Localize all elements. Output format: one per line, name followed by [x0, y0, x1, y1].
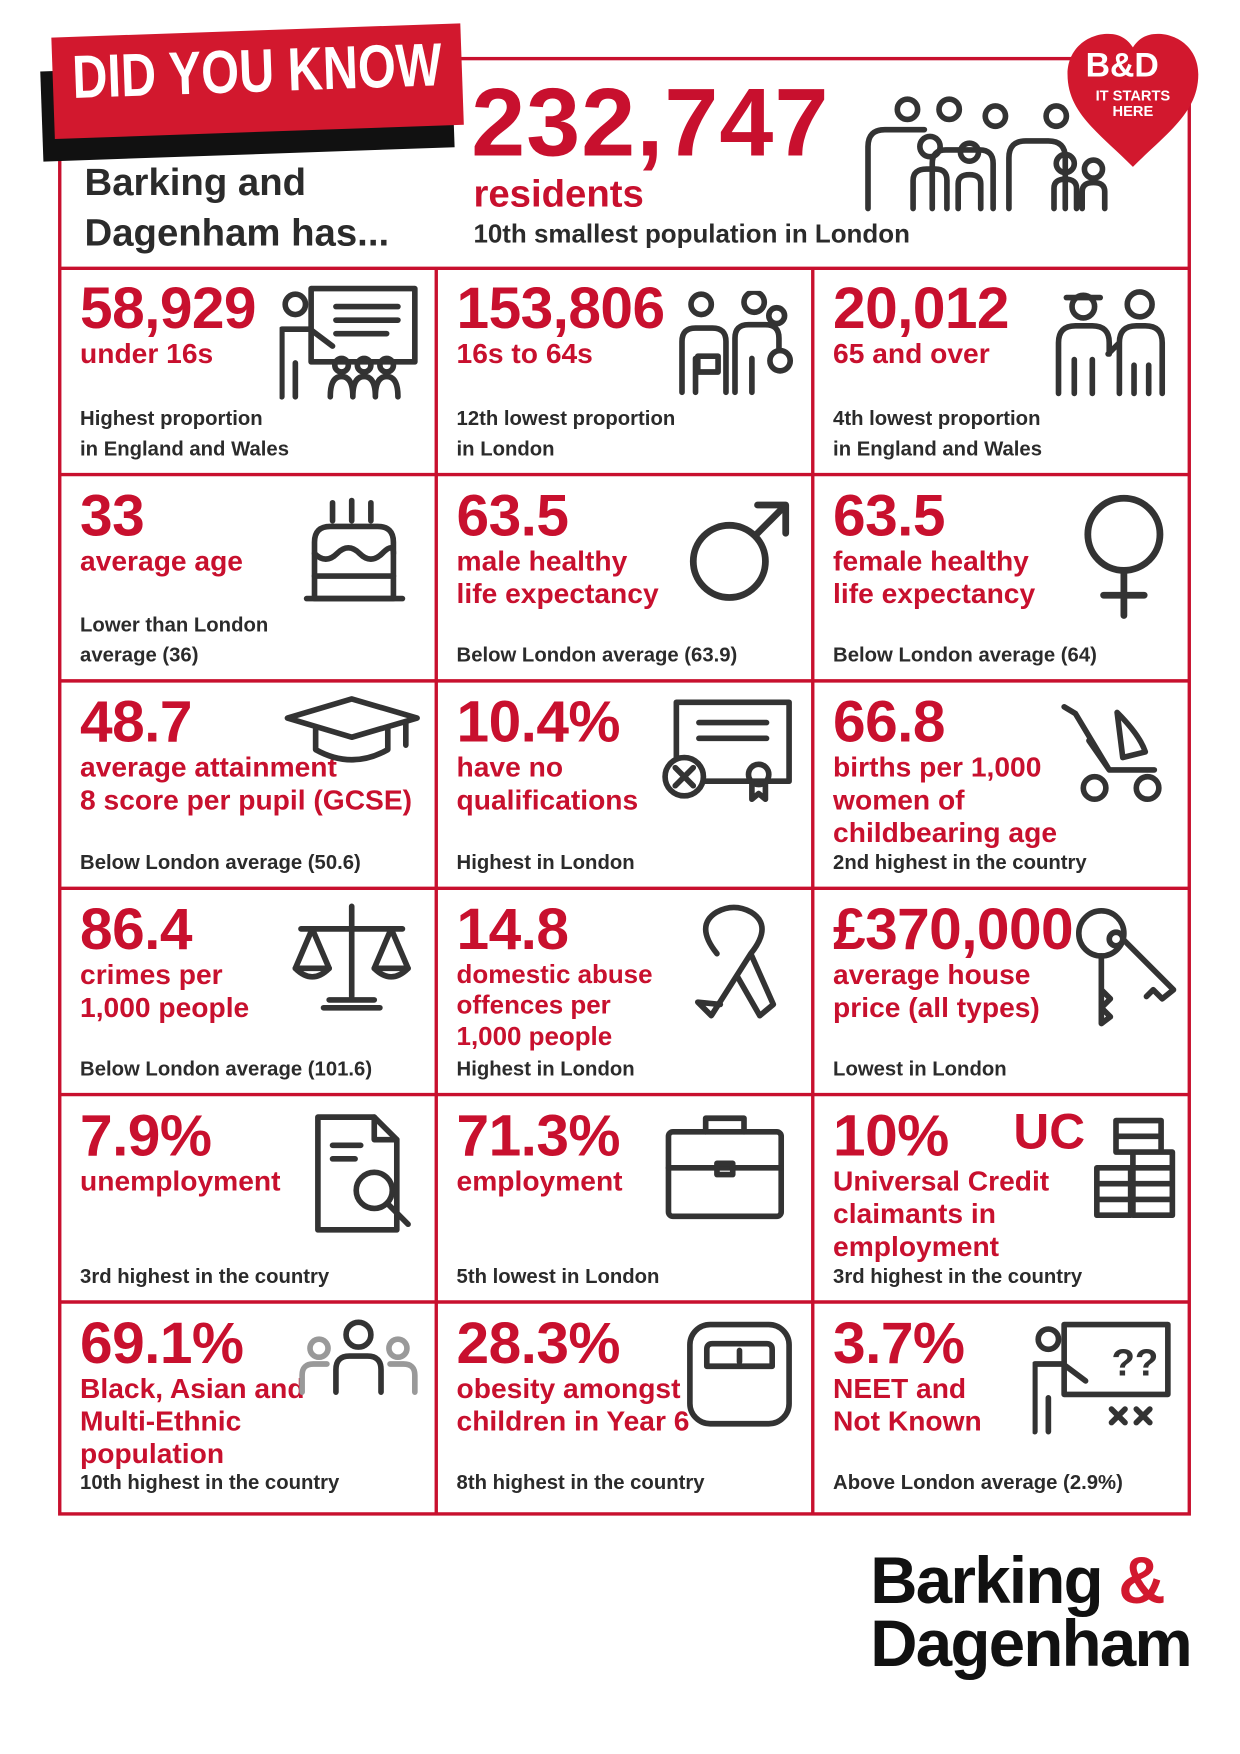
- cell: no qualifications: 10.4%: [457, 690, 620, 755]
- cell: employment: 5th lowest in London: [457, 1264, 659, 1287]
- cell: births: 66.8: [833, 690, 945, 755]
- cell: births: childbearing age: [833, 817, 1057, 849]
- cell: employment: 71.3%: [457, 1104, 620, 1169]
- cell: obesity: 8th highest in the country: [457, 1471, 705, 1494]
- cell: births: births per 1,000: [833, 752, 1041, 783]
- cell: ethnicity: [80, 1310, 418, 1494]
- logo: heart: B&D: [1086, 47, 1159, 85]
- logo: heart: IT STARTS: [1096, 87, 1170, 104]
- intro text: Dagenham has...: [85, 212, 389, 255]
- cell: obesity: children in Year 6: [457, 1405, 689, 1437]
- headline stat: residents: 232,747: [471, 69, 830, 177]
- cell: male: [457, 483, 790, 666]
- cell: NEET: ??: [1111, 1341, 1158, 1384]
- cell: universal credit: 10%: [833, 1104, 949, 1169]
- cell: obesity: [457, 1310, 792, 1494]
- cell: attainment: 48.7: [80, 690, 192, 755]
- cell: no qualifications: [457, 690, 792, 873]
- cell: obesity: obesity amongst: [457, 1372, 680, 1404]
- cell: NEET: 3.7%: [833, 1310, 964, 1376]
- cell: under 16s: Highest proportion: [80, 406, 263, 429]
- cell: under 16s: [80, 276, 418, 460]
- intro text: [85, 161, 389, 255]
- cell: under 16s: in England and Wales: [80, 437, 289, 459]
- cell: 65 and over: in England and Wales: [833, 437, 1042, 459]
- cell: average age: average (36): [80, 644, 198, 666]
- cell: male: Below London average (63.9): [457, 644, 737, 666]
- cell: house price: £370,000: [833, 897, 1073, 962]
- cell: house price: Lowest in London: [833, 1057, 1007, 1080]
- cell: 16s to 64s: [457, 276, 794, 459]
- cell: 65 and over: 65 and over: [833, 338, 990, 370]
- cell: crimes: Below London average (101.6): [80, 1057, 372, 1080]
- cell: NEET: [833, 1310, 1171, 1494]
- cell: 65 and over: 20,012: [833, 276, 1009, 342]
- cell: female: Below London average (64): [833, 644, 1097, 666]
- cell: crimes: crimes per: [80, 959, 223, 990]
- cell: employment: employment: [457, 1166, 623, 1197]
- cell: ethnicity: population: [80, 1438, 224, 1469]
- cell: unemployment: 3rd highest in the country: [80, 1264, 329, 1287]
- cell: no qualifications: Highest in London: [457, 851, 635, 873]
- footer logo: Barking &: [870, 1544, 1164, 1618]
- cell: 65 and over: 4th lowest proportion: [833, 406, 1040, 429]
- cell: under 16s: 58,929: [80, 276, 256, 342]
- cell: domestic abuse: offences per: [457, 990, 611, 1019]
- cell: under 16s: under 16s: [80, 338, 213, 370]
- cell: crimes: 1,000 people: [80, 991, 249, 1023]
- cell: births: [832, 690, 1162, 873]
- title banner: DID YOU KNOW: [71, 31, 443, 112]
- cell: domestic abuse: 14.8: [457, 897, 568, 962]
- cell: employment: [457, 1104, 784, 1287]
- cell: crimes: [80, 897, 411, 1080]
- cell: unemployment: unemployment: [80, 1166, 280, 1197]
- cell: universal credit: 3rd highest in the country: [833, 1264, 1082, 1287]
- cell: no qualifications: qualifications: [457, 785, 638, 816]
- cell: ethnicity: Black, Asian and: [80, 1372, 305, 1404]
- cell: NEET: NEET and: [833, 1372, 966, 1404]
- cell: female: 63.5: [833, 483, 945, 548]
- cell: male: male healthy: [457, 545, 627, 577]
- cell: universal credit: [833, 1104, 1176, 1287]
- cell: universal credit: claimants in: [833, 1198, 996, 1230]
- logo: heart: HERE: [1113, 103, 1153, 119]
- cell: unemployment: 7.9%: [80, 1104, 211, 1169]
- cell: universal credit: UC: [1013, 1105, 1085, 1160]
- cell: attainment: 8 score per pupil (GCSE): [80, 785, 412, 816]
- cell: female: female healthy: [833, 545, 1029, 577]
- cell: average age: average age: [80, 545, 243, 577]
- cell: NEET: Above London average (2.9%): [833, 1471, 1123, 1494]
- cell: ethnicity: Multi-Ethnic: [80, 1405, 241, 1437]
- intro text: Barking and: [85, 161, 306, 204]
- cell: attainment: average attainment: [80, 752, 337, 783]
- cell: domestic abuse: 1,000 people: [457, 1021, 612, 1050]
- logo: heart: [1068, 34, 1198, 167]
- cell: ethnicity: 10th highest in the country: [80, 1471, 339, 1494]
- cell: obesity: 28.3%: [457, 1310, 620, 1376]
- cell: no qualifications: have no: [457, 752, 563, 783]
- cell: male: life expectancy: [457, 578, 659, 609]
- cell: domestic abuse: domestic abuse: [457, 959, 653, 988]
- cell: domestic abuse: [457, 897, 776, 1080]
- cell: house price: [833, 897, 1176, 1080]
- cell: births: 2nd highest in the country: [833, 851, 1087, 873]
- cell: unemployment: [80, 1104, 411, 1287]
- cell: house price: price (all types): [833, 991, 1040, 1023]
- icon: people group: [865, 96, 1108, 212]
- cell: ethnicity: 69.1%: [80, 1310, 243, 1376]
- cell: 16s to 64s: 16s to 64s: [457, 338, 593, 370]
- headline stat: residents: 10th smallest population in London: [473, 219, 910, 248]
- cell: attainment: Below London average (50.6): [80, 851, 361, 873]
- cell: house price: average house: [833, 959, 1030, 990]
- cell: 16s to 64s: 12th lowest proportion: [457, 406, 675, 429]
- cell: female: [833, 483, 1164, 666]
- footer logo: [870, 1544, 1191, 1681]
- cell: 16s to 64s: in London: [457, 437, 555, 459]
- title banner: [40, 23, 464, 162]
- headline stat: residents: residents: [473, 172, 644, 215]
- cell: average age: [80, 483, 406, 666]
- cell: 65 and over: [833, 276, 1166, 460]
- cell: 16s to 64s: 153,806: [457, 276, 664, 342]
- headline stat: residents: [471, 69, 910, 248]
- cell: male: 63.5: [457, 483, 568, 548]
- cell: universal credit: employment: [833, 1231, 999, 1263]
- cell: attainment: [80, 690, 420, 873]
- footer logo: Dagenham: [870, 1607, 1191, 1681]
- cell: average age: Lower than London: [80, 613, 268, 636]
- cell: crimes: 86.4: [80, 897, 192, 962]
- cell: NEET: Not Known: [833, 1405, 982, 1437]
- cell: universal credit: Universal Credit: [833, 1166, 1049, 1197]
- cell: female: life expectancy: [833, 578, 1035, 609]
- cell: domestic abuse: Highest in London: [457, 1057, 635, 1080]
- cell: average age: 33: [80, 483, 144, 548]
- cell: births: women of: [833, 785, 965, 816]
